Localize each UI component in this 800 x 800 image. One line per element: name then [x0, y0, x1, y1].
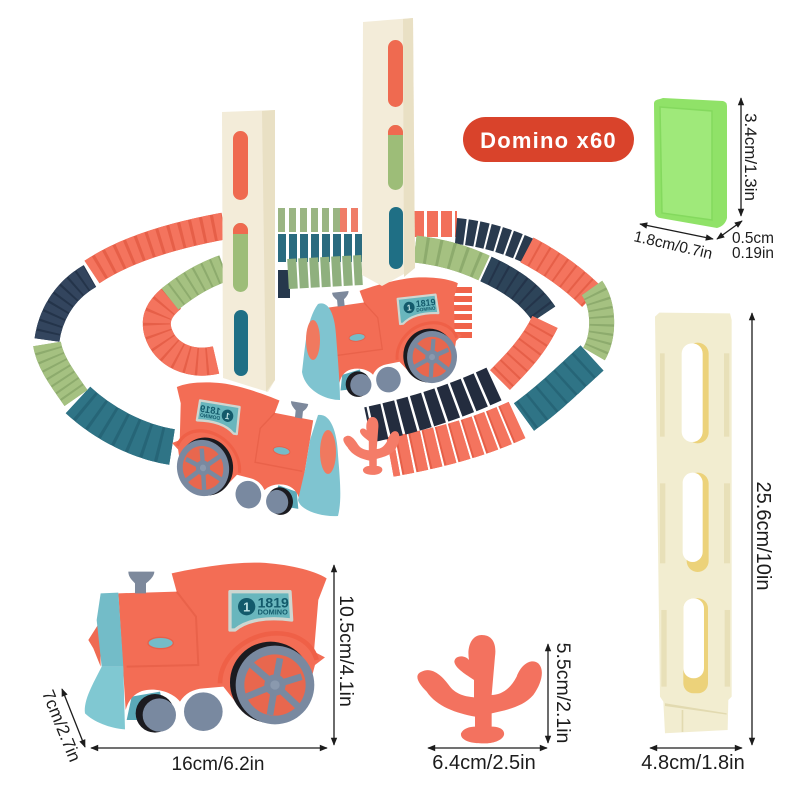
inner ring right: coral dominoes [500, 322, 545, 380]
back train: 1819 [415, 297, 436, 309]
domino dimension: depth: 0.5cm [732, 230, 774, 247]
domino dimension: width: 1.8cm/0.7in [632, 228, 714, 263]
sign: 1 1819 DOMINO [230, 592, 292, 630]
train dimension: depth: 7cm/2.7in [38, 687, 85, 765]
domino dimension: depth: 0.19in [732, 245, 774, 262]
outer ring left: green dominoes [47, 344, 76, 398]
tower grooves [660, 353, 730, 687]
domino rings [47, 220, 602, 457]
back row: green dominoes [278, 208, 340, 232]
back train front face [302, 303, 340, 400]
small cactus piece [343, 417, 399, 475]
tower dimension: width: 4.8cm/1.8in [641, 752, 745, 774]
cactus dimension: width: 6.4cm/2.5in [432, 752, 536, 774]
domino dimension: height: 3.4cm/1.3in [741, 113, 760, 201]
back row: green dominoes front [288, 270, 362, 274]
back tower [362, 18, 415, 286]
large train [85, 563, 327, 733]
outer ring right: teal dominoes [524, 358, 592, 417]
front train: 1 [225, 410, 230, 421]
inner ring bottom: navy dominoes [368, 384, 494, 425]
inner ring top right: green dominoes [415, 249, 484, 268]
back row: navy dominoes [278, 270, 290, 298]
front train front face [298, 415, 340, 516]
outer ring left: navy dominoes [47, 276, 90, 340]
inner ring left: coral dominoes [157, 298, 216, 362]
large cactus piece [417, 635, 542, 743]
outer ring top left: coral dominoes [92, 226, 224, 272]
label pill: Domino x60 [463, 117, 634, 162]
back train: 1 [406, 303, 412, 313]
tall tower [655, 313, 732, 733]
train front: blue [85, 593, 125, 729]
front train [165, 376, 335, 522]
sign: 1 1819 DOMINO: DOMINO [258, 607, 288, 616]
small wheels [136, 692, 223, 733]
outer ring right: green dominoes [592, 288, 602, 354]
label pill: Domino x60: Domino x60 [480, 128, 617, 153]
back train [306, 273, 468, 402]
cactus dimension: height: 5.5cm/2.1in [552, 643, 574, 743]
back row: teal dominoes [278, 234, 362, 262]
sign: 1 1819 DOMINO: 1819 [258, 594, 289, 610]
back tower slots [388, 40, 403, 269]
outer ring right: coral dominoes [527, 250, 592, 297]
coral dominoes behind back train [452, 287, 472, 340]
smokestack [128, 572, 154, 593]
train dimension: height: 10.5cm/4.1in [335, 595, 357, 707]
front tower slots [233, 131, 248, 376]
tower dimension: height: 25.6cm/10in [752, 482, 774, 590]
green domino [654, 98, 727, 228]
inner ring left: green dominoes [170, 268, 224, 299]
side light [148, 637, 173, 649]
outer ring bottom left: teal dominoes [78, 400, 172, 447]
inner ring right: navy dominoes [486, 269, 544, 314]
front tower [222, 110, 275, 392]
outer ring top right: navy dominoes [456, 231, 529, 251]
front train: DOMINO [200, 413, 220, 422]
outer ring top right: coral dominoes [413, 211, 457, 237]
train dimension: length: 16cm/6.2in [172, 754, 264, 775]
back row: coral dominoes [340, 208, 362, 232]
large wheel [230, 642, 314, 724]
front train: 1819 [199, 403, 221, 418]
back train: DOMINO [416, 306, 436, 314]
outer ring bottom: coral dominoes [390, 420, 517, 457]
domino dimension: depth [717, 221, 774, 262]
tower slots [682, 343, 709, 693]
sign: 1 1819 DOMINO: 1 [243, 600, 250, 614]
